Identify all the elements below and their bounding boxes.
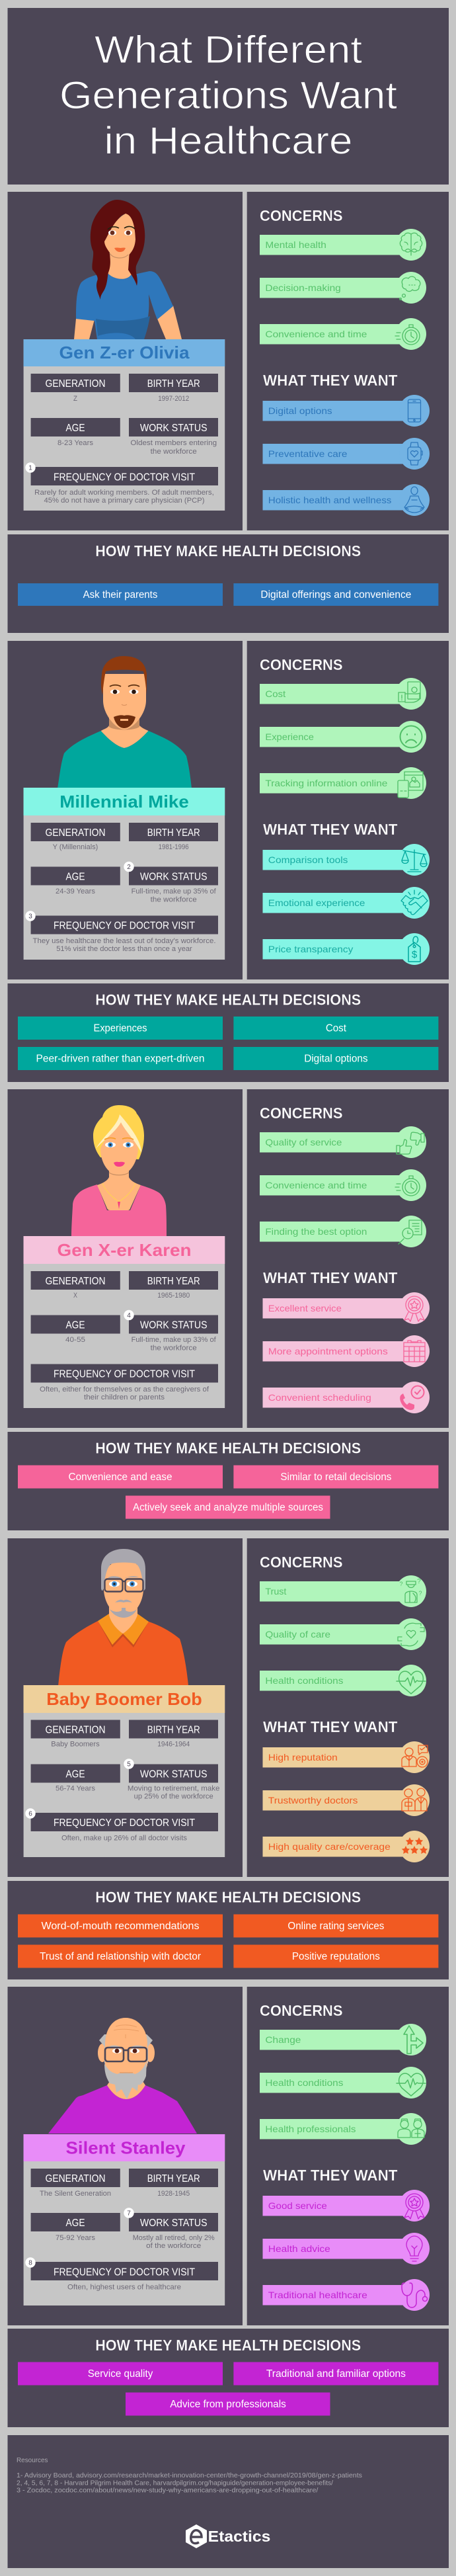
- want: comparison tools: [263, 844, 430, 876]
- section: Bob health decisions: [8, 1881, 449, 1979]
- section: Millennial Mike: [8, 641, 449, 979]
- field: frequency of doctor visit: FREQUENCY OF DOCTOR VISIT: [54, 472, 195, 483]
- name band: Gen Z-er Olivia: [59, 343, 190, 362]
- footnote badge 6: [25, 1808, 36, 1819]
- concern: convenience and time: [260, 318, 426, 350]
- field: generation: GENERATION: [45, 2173, 106, 2184]
- want: comparison tools: Comparison tools: [268, 854, 348, 865]
- heading: what they want: WHAT THEY WANT: [263, 372, 398, 389]
- want: excellent service: [263, 1292, 430, 1324]
- want: more appointment options: More appointment options: [268, 1346, 388, 1356]
- heading: concerns: CONCERNS: [260, 1104, 342, 1122]
- field: generation: [31, 2169, 120, 2198]
- footnote badge 8: [25, 2257, 36, 2268]
- field: frequency of doctor visit: Often, either for themselves or as the caregivers of: [40, 1386, 209, 1393]
- button: word-of-mouth: [18, 1914, 223, 1938]
- card background: [24, 788, 225, 960]
- want: digital options: [263, 395, 430, 427]
- button: experiences: [18, 1017, 223, 1040]
- field: work status: WORK STATUS: [140, 1768, 208, 1780]
- want: good service: Good service: [268, 2200, 327, 2211]
- concern: finding the best option: Finding the best option: [265, 1226, 367, 1237]
- name band: [24, 1685, 225, 1713]
- want: emotional experience: [263, 887, 430, 919]
- field: birth year: BIRTH YEAR: [147, 1276, 200, 1287]
- field: work status: of the workforce: [146, 2242, 201, 2250]
- button: digital options: [233, 1047, 438, 1070]
- resources: 1- Advisory Board, advisory.com/research/market-innovation-center/the-growth-channel/2019/08/gen-z-patients: [17, 2472, 362, 2479]
- field: birth year: 1981-1996: [159, 843, 189, 851]
- button: peer-driven: Peer-driven rather than expert-driven: [36, 1053, 205, 1065]
- name band: Baby Boomer Bob: [46, 1689, 202, 1709]
- field: work status: Mostly all retired, only 2%: [133, 2234, 215, 2242]
- concern: convenience and time: Convenience and time: [265, 329, 367, 339]
- want: health advice: [263, 2233, 430, 2264]
- field: birth year: 1928-1945: [157, 2190, 190, 2198]
- want: convenient scheduling: Convenient scheduling: [268, 1392, 371, 1403]
- field: work status: WORK STATUS: [140, 1320, 208, 1331]
- field: generation: Baby Boomers: [51, 1741, 100, 1749]
- button: trust of doctor: Trust of and relationship with doctor: [40, 1951, 201, 1962]
- field: frequency of doctor visit: 51% visit the doctor less than once a year: [56, 945, 192, 953]
- want: price transparency: [263, 933, 430, 965]
- section: Mike health decisions: [8, 983, 449, 1082]
- card background: [24, 1685, 225, 1857]
- section: Stanley health decisions: [8, 2329, 449, 2427]
- field: age: [31, 2213, 120, 2242]
- field: frequency of doctor visit: [31, 915, 218, 953]
- concern: tracking information online: [260, 767, 426, 799]
- button: similar to retail decisions: [233, 1466, 438, 1488]
- field: generation: [31, 823, 120, 851]
- concern: tracking information online: Tracking information online: [265, 778, 388, 788]
- field: age: AGE: [66, 2218, 85, 2229]
- logo: Etactics: [186, 2524, 270, 2548]
- card background: [24, 1236, 225, 1408]
- field: birth year: [129, 823, 218, 851]
- field: age: 56-74 Years: [56, 1784, 96, 1792]
- field: frequency of doctor visit: their children or parents: [84, 1393, 165, 1401]
- want: price transparency: Price transparency: [268, 944, 353, 954]
- footnote badge 7: [124, 2208, 134, 2218]
- panel: Olivia profile: [8, 192, 243, 530]
- button: digital offerings and convenience: Digital offerings and convenience: [260, 589, 411, 601]
- concern: decision-making: Decision-making: [265, 282, 341, 293]
- portrait: Mike: [57, 656, 192, 788]
- want: holistic health and wellness: [263, 484, 430, 516]
- name band: Silent Stanley: [66, 2138, 186, 2157]
- field: age: [31, 1765, 120, 1792]
- button: service quality: [18, 2362, 223, 2385]
- button: cost: Cost: [326, 1022, 347, 1034]
- heading: concerns: CONCERNS: [260, 656, 342, 673]
- field: age: 24-39 Years: [56, 888, 96, 895]
- section: Karen health decisions: [8, 1432, 449, 1530]
- field: frequency of doctor visit: [31, 1813, 218, 1843]
- button: trust of doctor: [18, 1944, 223, 1968]
- footnote badge 1: [25, 462, 36, 473]
- panel: Olivia concerns and wants: [247, 192, 449, 530]
- field: work status: Oldest members entering: [130, 439, 217, 447]
- concern: health conditions: Health conditions: [265, 1675, 343, 1686]
- concern: health conditions: [260, 1665, 426, 1696]
- heading: concerns: CONCERNS: [260, 207, 342, 224]
- field: age: 40-55: [65, 1336, 85, 1344]
- field: birth year: 1997-2012: [158, 395, 189, 403]
- resources: Resources: [17, 2456, 48, 2464]
- concern: quality of service: Quality of service: [265, 1137, 342, 1147]
- title: What Different: [95, 28, 362, 71]
- want: traditional healthcare: Traditional healthcare: [268, 2290, 367, 2300]
- field: birth year: 1946-1964: [157, 1741, 190, 1749]
- button: advice from professionals: Advice from professionals: [170, 2399, 286, 2410]
- field: frequency of doctor visit: They use healthcare the least out of today's workforce.: [33, 937, 215, 945]
- concern: change: Change: [265, 2034, 301, 2045]
- want: holistic health and wellness: Holistic health and wellness: [268, 495, 391, 505]
- name band: Gen X-er Karen: [57, 1240, 192, 1260]
- name band: Millennial Mike: [59, 792, 189, 811]
- button: ask their parents: [18, 583, 223, 606]
- concern: trust: Trust: [265, 1586, 287, 1597]
- panel: Bob concerns and wants: [247, 1538, 449, 1877]
- section: Gen X-er Karen: [8, 1089, 449, 1428]
- field: work status: the workforce: [151, 448, 197, 456]
- concern: cost: Cost: [265, 688, 285, 699]
- button: peer-driven: [18, 1047, 223, 1070]
- field: age: [31, 1315, 120, 1344]
- field: age: AGE: [66, 872, 85, 882]
- field: work status: [128, 1765, 219, 1800]
- concern: health conditions: [260, 2067, 426, 2098]
- field: work status: WORK STATUS: [140, 2218, 208, 2229]
- field: frequency of doctor visit: 45% do not have a primary care physician (PCP): [44, 497, 205, 505]
- title: in Healthcare: [104, 119, 353, 163]
- footnote badge 4: 4: [127, 1312, 131, 1319]
- concern: change: [260, 2024, 426, 2056]
- section: Silent Stanley: [8, 1987, 449, 2325]
- footnote badge 8: 8: [28, 2259, 32, 2267]
- footnote badge 5: 5: [127, 1761, 131, 1768]
- field: work status: [129, 866, 218, 903]
- field: generation: [31, 1720, 120, 1749]
- footnote badge 2: 2: [127, 864, 131, 871]
- concern: cost: [260, 678, 426, 710]
- section: Baby Boomer Bob: [8, 1538, 449, 1877]
- panel: Bob profile: [8, 1538, 243, 1877]
- button: digital offerings and convenience: [233, 583, 438, 606]
- concern: quality of care: Quality of care: [265, 1629, 330, 1640]
- button: word-of-mouth: Word-of-mouth recommendations: [41, 1921, 200, 1932]
- button: similar to retail decisions: Similar to retail decisions: [280, 1472, 392, 1483]
- want: high reputation: High reputation: [268, 1752, 338, 1763]
- portrait: Bob: [58, 1549, 188, 1686]
- panel: Mike profile: [8, 641, 243, 979]
- panel: Mike concerns and wants: [247, 641, 449, 979]
- field: age: [31, 418, 120, 447]
- concern: mental health: Mental health: [265, 239, 326, 250]
- button: positive reputations: Positive reputations: [292, 1951, 380, 1962]
- concern: finding the best option: [260, 1216, 426, 1247]
- field: birth year: BIRTH YEAR: [147, 827, 200, 839]
- concern: mental health: [260, 229, 426, 261]
- field: work status: the workforce: [151, 1344, 197, 1352]
- heading: how they make health decisions: HOW THEY MAKE HEALTH DECISIONS: [95, 1439, 361, 1456]
- footnote badge 7: 7: [127, 2210, 131, 2217]
- portrait: Karen: [71, 1105, 167, 1237]
- heading: concerns: CONCERNS: [260, 1554, 342, 1571]
- field: age: AGE: [66, 423, 85, 434]
- field: frequency of doctor visit: Often, make up 26% of all doctor visits: [61, 1835, 188, 1843]
- footnote badge 1: 1: [28, 464, 32, 472]
- field: frequency of doctor visit: Often, highest users of healthcare: [67, 2283, 181, 2291]
- button: service quality: Service quality: [88, 2368, 153, 2380]
- section: Olivia health decisions: [8, 534, 449, 633]
- want: trustworthy doctors: Trustworthy doctors: [268, 1795, 358, 1806]
- field: generation: [31, 374, 120, 403]
- footnote badge 5: [124, 1759, 134, 1769]
- logo: Etactics: Etactics: [208, 2528, 270, 2545]
- button: advice from professionals: [126, 2393, 330, 2415]
- field: work status: Full-time, make up 33% of: [132, 1336, 217, 1344]
- heading: how they make health decisions: HOW THEY MAKE HEALTH DECISIONS: [95, 2337, 361, 2354]
- want: convenient scheduling: [263, 1382, 430, 1413]
- field: generation: GENERATION: [45, 827, 106, 839]
- field: work status: up 25% of the workforce: [134, 1792, 213, 1800]
- footer panel: [8, 2435, 449, 2568]
- portrait: Stanley: [48, 2018, 197, 2134]
- concern: convenience and time: [260, 1169, 426, 1201]
- want: health advice: Health advice: [268, 2243, 330, 2254]
- concern: health professionals: [260, 2113, 426, 2145]
- heading: how they make health decisions: HOW THEY MAKE HEALTH DECISIONS: [95, 991, 361, 1008]
- field: age: [31, 866, 120, 895]
- field: generation: [31, 1271, 120, 1300]
- concern: quality of service: [260, 1126, 426, 1158]
- concern: trust: [260, 1575, 426, 1607]
- field: birth year: [129, 1271, 218, 1300]
- button: convenience and ease: Convenience and ease: [69, 1472, 172, 1483]
- want: price transparency: $: [412, 949, 418, 960]
- concern: trust: ?: [399, 1581, 403, 1587]
- field: generation: Z: [73, 395, 77, 403]
- panel: Karen concerns and wants: [247, 1089, 449, 1428]
- field: birth year: [129, 1720, 218, 1749]
- field: birth year: [129, 2169, 218, 2198]
- footnote badge 3: 3: [28, 913, 32, 921]
- heading: what they want: WHAT THEY WANT: [263, 1718, 398, 1735]
- want: high quality care/coverage: High quality care/coverage: [268, 1841, 391, 1852]
- field: work status: [129, 2213, 218, 2250]
- field: age: AGE: [66, 1320, 85, 1331]
- button: traditional and familiar options: [233, 2362, 438, 2385]
- field: work status: [129, 418, 218, 456]
- field: age: AGE: [66, 1768, 85, 1780]
- portrait: Olivia: [74, 200, 182, 339]
- field: birth year: 1965-1980: [157, 1292, 190, 1300]
- heading: what they want: WHAT THEY WANT: [263, 2167, 398, 2184]
- field: birth year: BIRTH YEAR: [147, 1725, 200, 1735]
- name band: [24, 788, 225, 815]
- field: generation: GENERATION: [45, 378, 106, 390]
- field: frequency of doctor visit: [31, 467, 218, 505]
- button: digital options: Digital options: [304, 1053, 368, 1065]
- field: age: 8-23 Years: [57, 439, 94, 447]
- concern: decision-making: [260, 272, 426, 304]
- footnote badge 6: 6: [28, 1811, 32, 1817]
- field: generation: Y (Millennials): [53, 843, 98, 851]
- footnote badge 2: [124, 862, 134, 872]
- field: frequency of doctor visit: FREQUENCY OF DOCTOR VISIT: [54, 921, 195, 931]
- field: generation: X: [73, 1292, 78, 1300]
- want: digital options: Digital options: [268, 405, 332, 416]
- concern: experience: [260, 721, 426, 753]
- heading: what they want: WHAT THEY WANT: [263, 1269, 398, 1286]
- field: frequency of doctor visit: FREQUENCY OF DOCTOR VISIT: [54, 2267, 195, 2278]
- button: actively seek: [126, 1496, 330, 1518]
- button: ask their parents: Ask their parents: [83, 589, 158, 601]
- panel: Karen profile: [8, 1089, 243, 1428]
- heading: what they want: WHAT THEY WANT: [263, 821, 398, 838]
- panel: Stanley profile: [8, 1987, 243, 2325]
- field: work status: the workforce: [151, 895, 197, 903]
- section: Gen Z Olivia: [8, 192, 449, 530]
- resources: 2, 4, 5, 6, 7, 8 - Harvard Pilgrim Health Care, harvardpilgrim.org/hapiguide/generation-employee-benefits/: [17, 2479, 333, 2487]
- want: emotional experience: Emotional experience: [268, 897, 365, 908]
- field: generation: GENERATION: [45, 1276, 106, 1287]
- name band: [24, 2134, 225, 2161]
- heading: concerns: CONCERNS: [260, 2002, 342, 2019]
- field: birth year: [129, 374, 218, 403]
- concern: trust: ?: [418, 1590, 422, 1597]
- button: positive reputations: [233, 1944, 438, 1968]
- field: work status: WORK STATUS: [140, 872, 208, 882]
- field: frequency of doctor visit: FREQUENCY OF DOCTOR VISIT: [54, 1817, 195, 1829]
- concern: trust: ?: [417, 1578, 421, 1585]
- title: Generations Want: [59, 74, 397, 117]
- want: traditional healthcare: [263, 2279, 430, 2311]
- footnote badge 4: [124, 1310, 134, 1320]
- field: work status: Moving to retirement, make: [128, 1784, 219, 1792]
- button: traditional and familiar options: Traditional and familiar options: [266, 2368, 406, 2380]
- name band: [24, 1236, 225, 1264]
- field: frequency of doctor visit: [31, 2262, 218, 2291]
- card background: [24, 339, 225, 511]
- resources: 3 - Zocdoc, zocdoc.com/about/news/new-study-why-americans-are-dropping-out-of-healthcare/: [17, 2487, 318, 2495]
- button: experiences: Experiences: [94, 1022, 147, 1034]
- panel: Stanley concerns and wants: [247, 1987, 449, 2325]
- field: work status: [129, 1315, 218, 1352]
- heading: how they make health decisions: HOW THEY MAKE HEALTH DECISIONS: [95, 542, 361, 560]
- field: birth year: BIRTH YEAR: [147, 378, 200, 390]
- concern: quality of care: [260, 1618, 426, 1650]
- want: preventative care: [263, 438, 430, 470]
- button: actively seek: Actively seek and analyze multiple sources: [133, 1502, 323, 1513]
- want: more appointment options: [263, 1335, 430, 1367]
- concern: health professionals: Health professionals: [265, 2124, 356, 2134]
- field: work status: Full-time, make up 35% of: [132, 888, 217, 895]
- button: online rating services: [233, 1914, 438, 1938]
- want: preventative care: Preventative care: [268, 448, 348, 459]
- want: excellent service: Excellent service: [268, 1303, 342, 1313]
- resources: [17, 2456, 362, 2495]
- field: generation: GENERATION: [45, 1725, 106, 1735]
- footnote badge 3: [25, 911, 36, 921]
- button: cost: [233, 1017, 438, 1040]
- want: good service: [263, 2190, 430, 2222]
- concern: convenience and time: Convenience and time: [265, 1180, 367, 1190]
- field: work status: WORK STATUS: [140, 423, 208, 434]
- button: online rating services: Online rating services: [287, 1921, 385, 1932]
- name band: [24, 339, 225, 366]
- concern: experience: Experience: [265, 731, 314, 742]
- field: generation: The Silent Generation: [40, 2190, 111, 2198]
- want: trustworthy doctors: [263, 1784, 430, 1816]
- title panel: [8, 8, 449, 185]
- field: age: 75-92 Years: [56, 2234, 96, 2242]
- field: frequency of doctor visit: Rarely for adult working members. Of adult members,: [34, 489, 214, 497]
- title: [59, 28, 397, 163]
- field: frequency of doctor visit: FREQUENCY OF DOCTOR VISIT: [54, 1369, 195, 1380]
- want: high reputation: [263, 1741, 430, 1773]
- concern: health conditions: Health conditions: [265, 2077, 343, 2088]
- field: birth year: BIRTH YEAR: [147, 2173, 200, 2184]
- button: convenience and ease: [18, 1466, 223, 1488]
- field: frequency of doctor visit: [31, 1364, 218, 1401]
- heading: how they make health decisions: HOW THEY MAKE HEALTH DECISIONS: [95, 1889, 361, 1906]
- want: high quality care/coverage: [263, 1831, 430, 1862]
- card background: [24, 2134, 225, 2306]
